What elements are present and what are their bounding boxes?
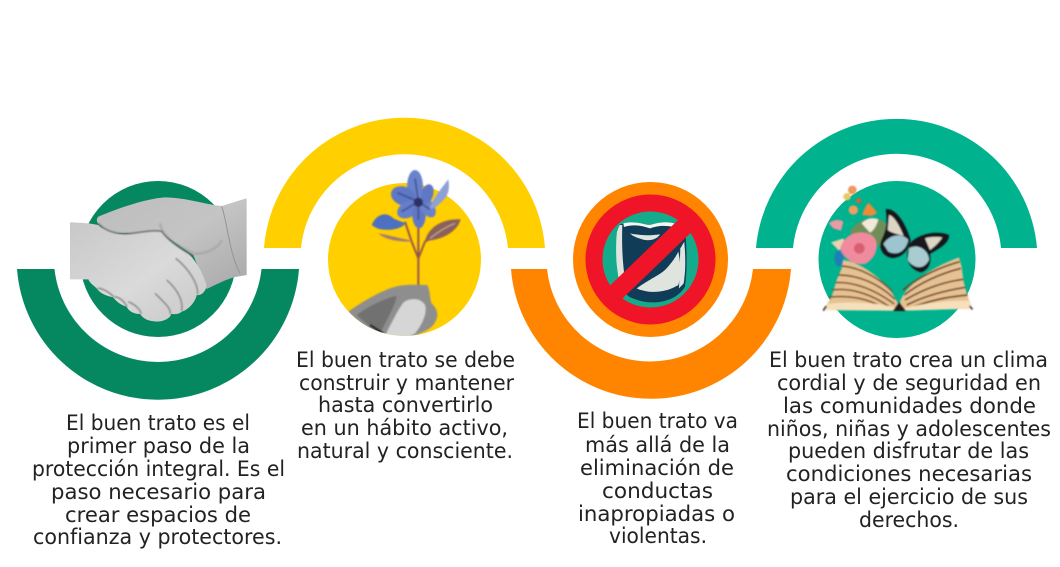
text block: step 4: pueden disfrutar de las bbox=[788, 439, 1029, 463]
yellow upper arc bbox=[264, 118, 545, 248]
text block: step 1: paso necesario para bbox=[51, 480, 266, 504]
panel: step 3 mouth bbox=[511, 182, 791, 399]
text block: step 3: El buen trato va bbox=[577, 409, 738, 433]
text block: step 1: crear espacios de bbox=[65, 503, 251, 527]
text block: step 4: niños, niñas y adolescentes bbox=[767, 417, 1051, 441]
text block: step 4: condiciones necesarias bbox=[786, 462, 1032, 486]
text block: step 2 bbox=[296, 348, 515, 463]
text block: step 2: natural y consciente. bbox=[297, 439, 513, 463]
text block: step 3: eliminación de bbox=[580, 456, 734, 480]
text block: step 3: inapropiadas o bbox=[578, 502, 735, 526]
icon: hand holding flower bbox=[348, 170, 461, 340]
panel: step 1 handshake bbox=[17, 181, 299, 400]
text block: step 2: El buen trato se debe bbox=[296, 348, 515, 372]
text block: step 4: para el ejercicio de sus bbox=[790, 485, 1028, 509]
icon: open book with flowers and butterfly bbox=[823, 186, 972, 311]
panel: step 2 flower bbox=[264, 118, 545, 340]
book bbox=[823, 257, 972, 311]
text block: step 3: más allá de la bbox=[585, 433, 730, 457]
butterfly bbox=[880, 209, 949, 272]
text block: step 4: derechos. bbox=[859, 508, 959, 532]
panel: step 4 book and butterfly bbox=[756, 119, 1037, 338]
text block: step 1: El buen trato es el bbox=[66, 411, 250, 435]
hand bbox=[348, 285, 437, 340]
text block: step 3: violentas. bbox=[609, 524, 707, 548]
prohibition slash bbox=[610, 222, 689, 298]
orange lower arc bbox=[511, 269, 791, 399]
text block: step 4: El buen trato crea un clima bbox=[769, 348, 1048, 372]
text block: step 4 bbox=[767, 348, 1051, 532]
text block: step 2: hasta convertirlo bbox=[318, 393, 493, 417]
teal upper arc bbox=[756, 119, 1037, 248]
icon: handshake photo bbox=[70, 197, 247, 322]
text block: step 2: en un hábito activo, bbox=[301, 416, 508, 440]
text block: step 4: las comunidades donde bbox=[783, 394, 1036, 418]
small flowers bbox=[829, 186, 887, 266]
text block: step 1: primer paso de la bbox=[67, 434, 250, 458]
yellow circle bbox=[328, 183, 481, 336]
text block: step 3 bbox=[577, 409, 738, 548]
icon: shouting mouth bbox=[616, 222, 687, 302]
text block: step 1 bbox=[32, 411, 285, 549]
teal circle bbox=[818, 181, 976, 338]
text block: step 4: cordial y de seguridad en bbox=[777, 371, 1041, 395]
text block: step 3: conductas bbox=[602, 479, 713, 503]
green lower arc bbox=[17, 269, 299, 400]
text block: step 1: protección integral. Es el bbox=[32, 457, 285, 481]
text block: step 1: confianza y protectores. bbox=[33, 525, 282, 549]
prohibition ring bbox=[594, 203, 707, 316]
text block: step 2: construir y mantener bbox=[299, 371, 514, 395]
green circle bbox=[80, 181, 236, 337]
teal disk bbox=[600, 210, 700, 310]
orange circle bbox=[573, 182, 728, 337]
